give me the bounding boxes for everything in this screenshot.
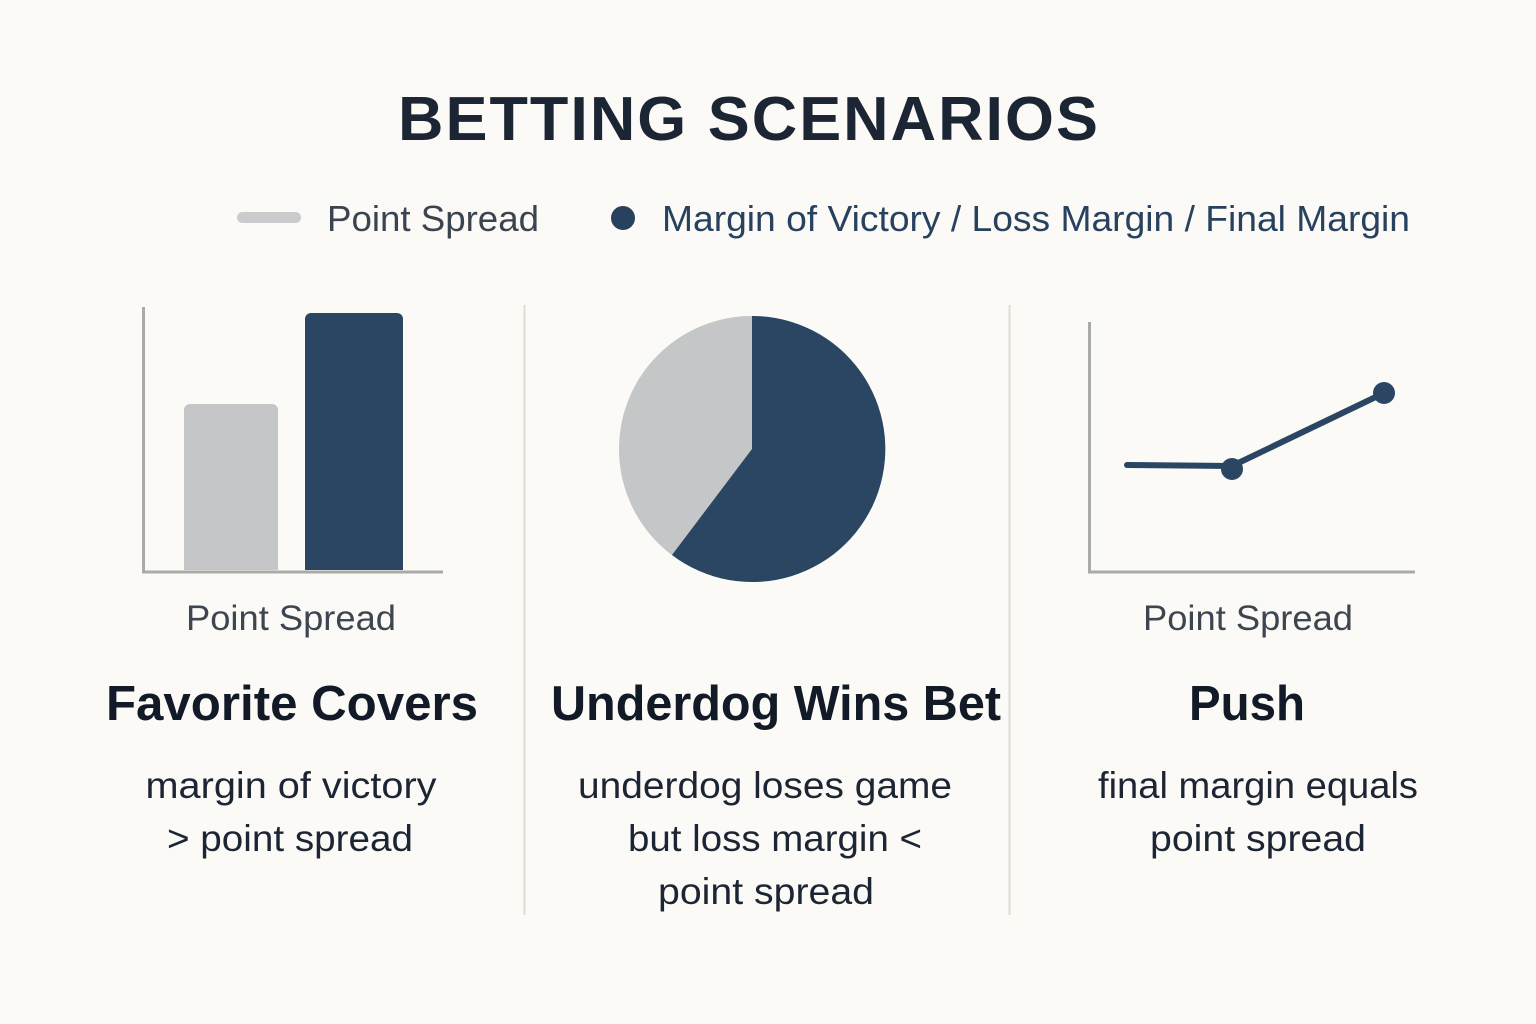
panel: favorite covers bbox=[106, 307, 478, 859]
bar chart bbox=[144, 307, 443, 572]
description bbox=[146, 765, 437, 859]
axis label: Point Spread bbox=[186, 599, 396, 638]
description: > point spread bbox=[167, 818, 413, 859]
legend item: point spread bbox=[237, 198, 539, 239]
panel: underdog wins bet bbox=[551, 316, 1001, 912]
pie chart bbox=[619, 316, 885, 582]
line chart bbox=[1090, 322, 1415, 572]
panel: push bbox=[1090, 322, 1418, 859]
axis label: Point Spread bbox=[1143, 599, 1353, 638]
heading: Push bbox=[1189, 677, 1305, 731]
description: final margin equals bbox=[1098, 765, 1418, 806]
title: BETTING SCENARIOS bbox=[398, 85, 1100, 154]
legend item: margin: Margin of Victory / Loss Margin / Final Margin bbox=[662, 198, 1410, 239]
description: point spread bbox=[1150, 818, 1366, 859]
heading: Underdog Wins Bet bbox=[551, 677, 1001, 731]
legend bbox=[237, 198, 1410, 239]
description: underdog loses game bbox=[578, 765, 952, 806]
heading: Favorite Covers bbox=[106, 677, 478, 731]
description: point spread bbox=[658, 871, 874, 912]
legend item: point spread: Point Spread bbox=[327, 198, 539, 239]
description bbox=[1098, 765, 1418, 859]
description: but loss margin < bbox=[628, 818, 922, 859]
description bbox=[578, 765, 952, 912]
description: margin of victory bbox=[146, 765, 437, 806]
